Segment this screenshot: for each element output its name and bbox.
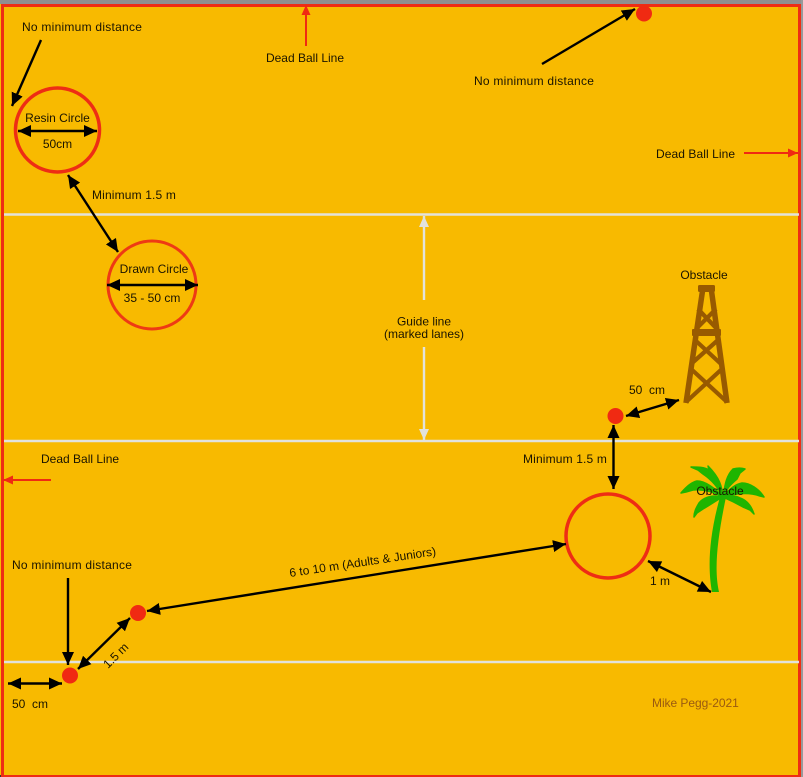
50 cm to tower: 50 cm	[629, 383, 665, 397]
dead ball line left	[3, 452, 119, 480]
1.5 m distance: 1.5 m	[100, 640, 131, 671]
50 cm from edge	[8, 684, 62, 711]
minimum 1.5 m separation	[68, 175, 176, 252]
1 m distance	[648, 561, 711, 592]
dead ball line top: Dead Ball Line	[266, 51, 344, 65]
50 cm to tower	[626, 383, 679, 416]
minimum 1.5 m vertical	[523, 425, 614, 489]
dead ball line right: Dead Ball Line	[656, 147, 735, 161]
resin circle: Resin Circle	[25, 111, 90, 125]
1.5 m distance	[78, 618, 131, 671]
target dot corner	[62, 668, 78, 684]
palm tree obstacle	[681, 466, 764, 592]
resin circle	[16, 88, 100, 172]
guide line label: (marked lanes)	[384, 327, 464, 341]
minimum 1.5 m vertical: Minimum 1.5 m	[523, 452, 607, 466]
50 cm from edge: 50 cm	[12, 697, 48, 711]
palm tree obstacle: Obstacle	[696, 484, 744, 498]
guide lines	[4, 214, 799, 662]
drawn circle: 35 - 50 cm	[124, 291, 180, 305]
resin circle: 50cm	[43, 137, 72, 151]
minimum 1.5 m separation: Minimum 1.5 m	[92, 188, 176, 202]
guide line label	[384, 216, 464, 440]
obstacle tower: Obstacle	[680, 268, 728, 282]
large circle	[566, 494, 650, 578]
no minimum distance top right: No minimum distance	[474, 74, 594, 88]
6 to 10 m distance: 6 to 10 m (Adults & Juniors)	[288, 544, 437, 580]
drawn circle	[107, 241, 198, 329]
no minimum distance top right	[474, 6, 652, 88]
dead ball line left: Dead Ball Line	[41, 452, 119, 466]
dead ball line top	[266, 5, 344, 65]
obstacle tower	[680, 268, 728, 403]
6 to 10 m distance	[147, 544, 566, 611]
no minimum distance top left: No minimum distance	[22, 20, 142, 34]
drawn circle: Drawn Circle	[120, 262, 189, 276]
target dot lower	[130, 605, 146, 621]
no minimum distance bottom left: No minimum distance	[12, 558, 132, 572]
1 m distance: 1 m	[650, 574, 670, 588]
no minimum distance top left	[12, 20, 142, 106]
author credit: Mike Pegg-2021	[652, 696, 739, 710]
target dot upper	[608, 408, 624, 424]
no minimum distance bottom left	[12, 558, 132, 665]
guide line label: Guide line	[397, 314, 451, 328]
